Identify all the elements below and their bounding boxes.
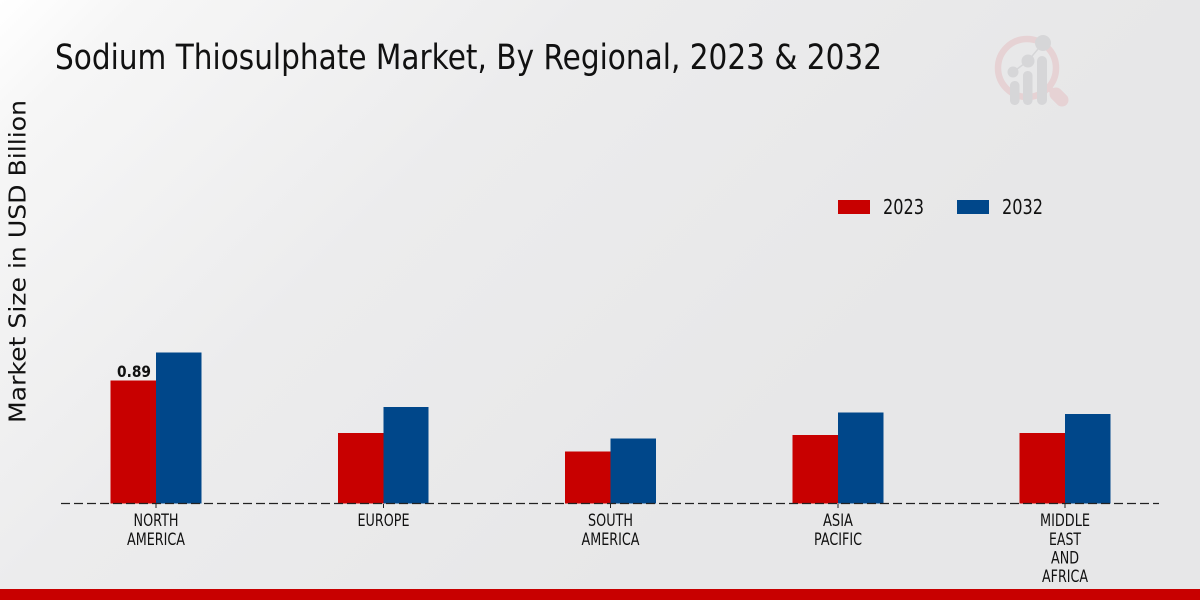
bars: Asia Pacific [792,412,884,504]
category label: North America: AMERICA [127,530,185,550]
y-axis label: Market Size in USD Billion [6,100,32,423]
legend item: 2023: 2023 [883,195,924,219]
value label: 0.89: 0.89 [117,362,151,381]
bars: Middle East and Africa [1020,414,1110,504]
legend item: 2032 [957,195,1043,219]
category label: Asia Pacific [814,511,862,550]
category label: South America [582,511,640,550]
footer bar [0,589,1200,600]
category label: Middle East and Africa: AND [1051,548,1079,568]
bars: Europe [338,407,428,504]
category label: Asia Pacific: ASIA [823,511,853,531]
category label: South America: SOUTH [588,511,633,531]
legend [838,195,1043,219]
legend item: 2023 [838,195,924,219]
bars: North America [110,352,202,504]
category label: Middle East and Africa [1040,511,1090,587]
category label: Middle East and Africa: MIDDLE [1040,511,1090,531]
bars: South America [565,438,656,504]
title: Sodium Thiosulphate Market, By Regional, 2023 & 2032 [55,38,882,78]
category label: North America: NORTH [134,511,178,531]
category label: Middle East and Africa: AFRICA [1042,567,1088,587]
category label: North America [127,511,185,550]
category label: Europe: EUROPE [358,511,410,531]
legend item: 2032: 2032 [1002,195,1043,219]
category label: Asia Pacific: PACIFIC [814,530,862,550]
bar chart [61,352,1159,587]
x-axis baseline [61,502,1159,504]
icon: watermark logo [998,35,1062,105]
category label: Middle East and Africa: EAST [1049,530,1081,550]
category label: South America: AMERICA [582,530,640,550]
